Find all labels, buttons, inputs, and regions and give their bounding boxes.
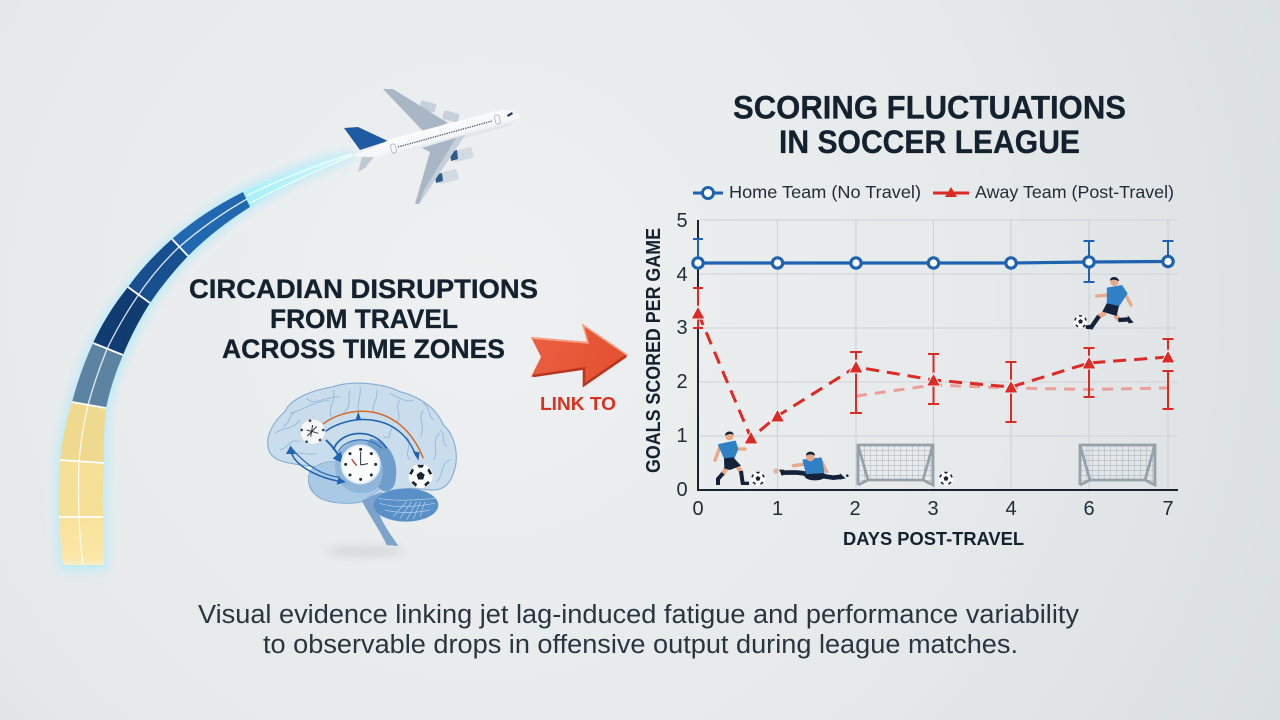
far wing <box>383 89 448 132</box>
y axis tick labels: 5 <box>676 210 688 232</box>
caption <box>198 601 1079 659</box>
flight path arc <box>56 151 352 570</box>
label: link to: LINK TO <box>540 394 616 414</box>
home team series <box>693 256 1173 268</box>
arc segment: day 6 <box>128 239 188 303</box>
tailplane <box>352 153 377 172</box>
y axis tick labels: 1 <box>676 425 688 447</box>
heading: circadian disruptions: ACROSS TIME ZONES <box>222 334 505 364</box>
thalamic ring <box>335 440 388 493</box>
flight trail <box>243 153 352 207</box>
y axis tick labels <box>676 210 688 501</box>
icon: brain with clock and soccer balls <box>268 383 456 555</box>
home error bars <box>693 239 1174 282</box>
engines: near wing <box>435 147 474 184</box>
x axis tick labels: 1 <box>772 498 783 520</box>
icon: soccer ball <box>939 471 953 486</box>
y axis title: GOALS SCORED PER GAME <box>643 228 665 473</box>
chart title <box>733 90 1126 160</box>
legend: home team: Home Team (No Travel) <box>729 182 921 202</box>
x axis tick labels: 4 <box>1005 498 1017 520</box>
y axis tick labels: 3 <box>676 317 688 339</box>
x axis tick labels: 6 <box>1083 498 1095 520</box>
x axis tick labels: 2 <box>849 498 861 520</box>
arc segment: day 7 <box>172 192 250 256</box>
icon: kicking player <box>1085 277 1134 329</box>
engines: far wing <box>419 100 460 123</box>
soccer ball: left <box>300 419 325 444</box>
icon: sliding player <box>773 452 849 480</box>
chart title: SCORING FLUCTUATIONS <box>733 90 1126 126</box>
line chart: goals scored per game <box>643 210 1178 549</box>
arc segment: day 5 <box>93 287 150 355</box>
near wing <box>415 135 465 204</box>
clock <box>341 444 381 484</box>
arc segment: day 3 <box>60 402 106 463</box>
axes <box>698 220 1178 490</box>
icon: goal right <box>1080 445 1155 485</box>
tail fin <box>344 127 388 150</box>
faded away series <box>856 385 1168 396</box>
fuselage <box>352 110 521 157</box>
x axis tick labels: 3 <box>927 498 939 520</box>
arc segment: day 2 <box>59 460 104 517</box>
soccer ball: right <box>409 464 433 488</box>
x axis tick labels: 7 <box>1162 498 1174 520</box>
chart title: IN SOCCER LEAGUE <box>779 124 1080 160</box>
icon: soccer ball <box>1074 315 1087 328</box>
caption: Visual evidence linking jet lag-induced fatigue and performance variability <box>198 601 1079 629</box>
y axis tick labels: 4 <box>676 264 688 286</box>
caption: to observable drops in offensive output during league matches. <box>263 631 1018 659</box>
heading: circadian disruptions: FROM TRAVEL <box>270 304 458 334</box>
heading: circadian disruptions: CIRCADIAN DISRUPTIONS <box>189 274 538 304</box>
icon: soccer ball <box>751 471 765 486</box>
away team series <box>691 306 1175 444</box>
arc segment: day 4 <box>72 343 123 408</box>
heading: circadian disruptions <box>189 274 538 364</box>
x axis tick labels <box>692 498 1174 520</box>
arc segment: day 1 <box>59 517 104 565</box>
icon: standing player <box>715 431 749 485</box>
icon: airplane <box>344 89 521 204</box>
arrow: link to <box>531 324 628 414</box>
x axis tick labels: 0 <box>692 498 704 520</box>
icon: goal left <box>858 445 933 485</box>
away error bars <box>693 288 1174 422</box>
legend <box>693 182 1174 202</box>
x axis title: DAYS POST-TRAVEL <box>843 529 1024 549</box>
legend: away team: Away Team (Post-Travel) <box>975 182 1174 202</box>
y axis tick labels: 0 <box>676 479 688 501</box>
y axis tick labels: 2 <box>676 371 688 393</box>
